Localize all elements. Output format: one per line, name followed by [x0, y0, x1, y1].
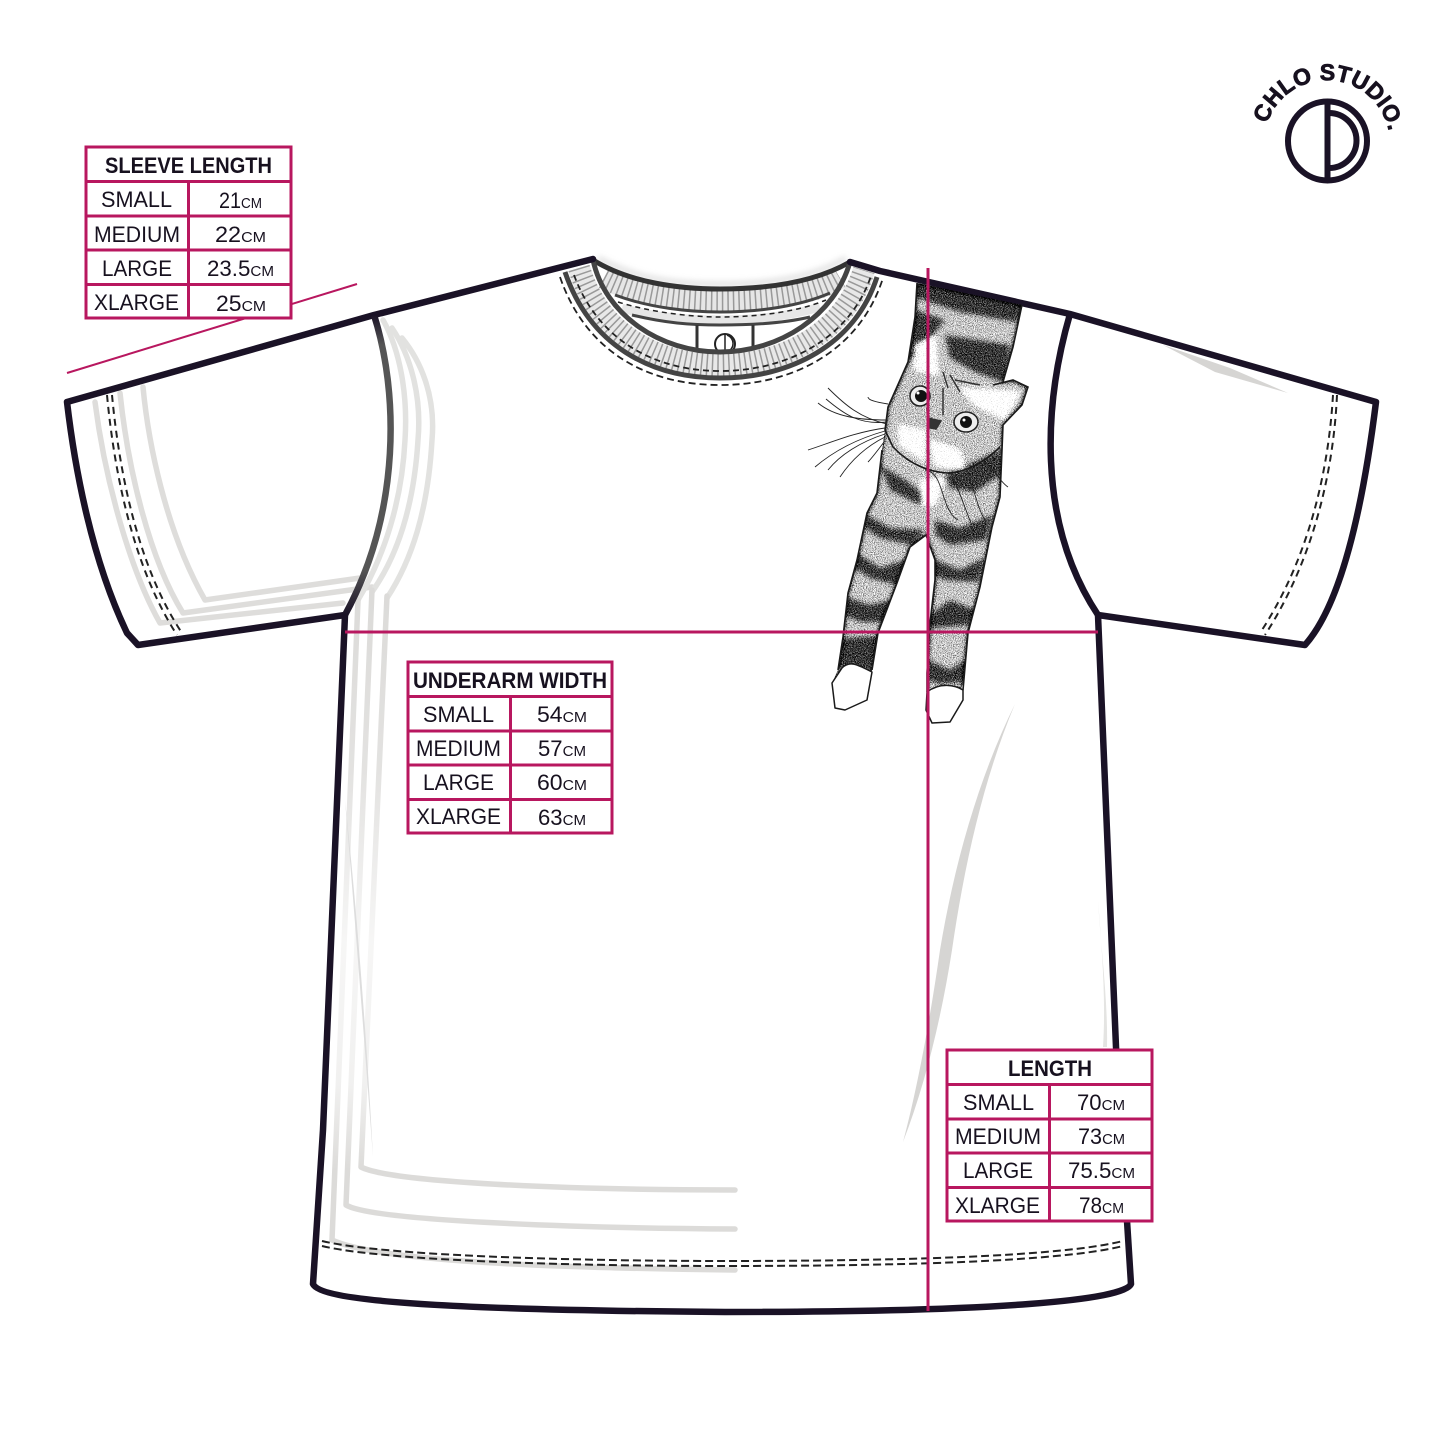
fold shadows: left sleeve and armhole	[95, 320, 433, 623]
row: xlarge: 25CM	[216, 291, 266, 316]
row: large: 75.5CM	[1068, 1158, 1135, 1183]
row: xlarge: XLARGE	[955, 1193, 1040, 1218]
row: xlarge	[416, 804, 586, 830]
row: medium: MEDIUM	[416, 736, 501, 761]
row: medium: MEDIUM	[94, 222, 180, 247]
heading: underarm width: UNDERARM WIDTH	[413, 668, 607, 693]
row: medium: MEDIUM	[955, 1124, 1041, 1149]
collar	[560, 258, 883, 385]
table: sleeve length	[86, 147, 291, 318]
wrinkle: right sleeve	[1163, 345, 1288, 393]
row: xlarge	[955, 1193, 1124, 1218]
measure line: length	[926, 268, 930, 1311]
row: small	[963, 1090, 1125, 1115]
collar: front rib band	[560, 260, 883, 385]
left armhole seam	[345, 315, 391, 615]
measure line: underarm width	[345, 630, 1098, 634]
row: small: 54CM	[537, 702, 587, 727]
row: large: 60CM	[537, 770, 587, 795]
shirt outline	[67, 259, 1376, 1312]
cat: paws	[832, 664, 963, 723]
row: small	[423, 702, 587, 727]
row: small: SMALL	[963, 1090, 1034, 1115]
cat: left eye	[910, 386, 930, 406]
heading: sleeve length: SLEEVE LENGTH	[105, 153, 272, 178]
collar: neck label	[697, 325, 753, 354]
fold shadows: body and hem	[332, 590, 735, 1270]
measure line: sleeve length	[67, 284, 357, 373]
cat: pale face and fur	[898, 335, 1020, 505]
table: length	[947, 1050, 1152, 1221]
row: xlarge: XLARGE	[94, 290, 179, 315]
row: large: LARGE	[963, 1158, 1033, 1183]
row: large	[102, 256, 274, 281]
logo: monogram	[1288, 101, 1367, 181]
cat: nose and forehead marks	[928, 372, 980, 429]
row: small	[101, 187, 262, 213]
row: small: 21CM	[219, 188, 262, 213]
row: large	[963, 1158, 1135, 1183]
row: large: 23.5CM	[207, 256, 274, 281]
cat: right eye	[954, 412, 978, 432]
cat print	[808, 283, 1029, 724]
row: medium: 57CM	[538, 736, 586, 761]
row: xlarge	[94, 290, 266, 316]
row: xlarge: XLARGE	[416, 804, 501, 829]
row: medium	[955, 1124, 1125, 1149]
row: small: SMALL	[423, 702, 494, 727]
logo: wordmark: CHLO STUDIO.	[1254, 64, 1400, 130]
row: large: LARGE	[102, 256, 172, 281]
row: medium	[416, 736, 586, 761]
stitching	[107, 395, 1337, 1266]
table: underarm width	[408, 662, 612, 833]
wrinkle: lower right side	[1098, 900, 1107, 1047]
logo: chlo studio	[1254, 64, 1400, 184]
row: small: SMALL	[101, 187, 172, 212]
cat: darker fur markings	[838, 283, 1022, 684]
collar: back rib band	[593, 260, 850, 325]
row: large	[423, 770, 587, 795]
heading: length: LENGTH	[1008, 1056, 1092, 1081]
row: medium: 22CM	[215, 222, 266, 247]
wrinkle: lower left side	[345, 800, 373, 1157]
row: small: 70CM	[1077, 1090, 1125, 1115]
cat: ink outline	[838, 283, 1028, 692]
cat: stippled body	[834, 283, 1027, 689]
row: medium: 73CM	[1078, 1124, 1125, 1149]
cat: whiskers	[808, 388, 1008, 525]
wrinkle: chest	[903, 704, 1015, 1142]
row: xlarge: 78CM	[1079, 1193, 1124, 1218]
row: medium	[94, 222, 266, 247]
t-shirt illustration	[67, 258, 1376, 1312]
right armhole seam	[1051, 314, 1098, 615]
row: xlarge: 63CM	[538, 805, 586, 830]
collar: neck shadow	[598, 258, 846, 284]
row: large: LARGE	[423, 770, 494, 795]
